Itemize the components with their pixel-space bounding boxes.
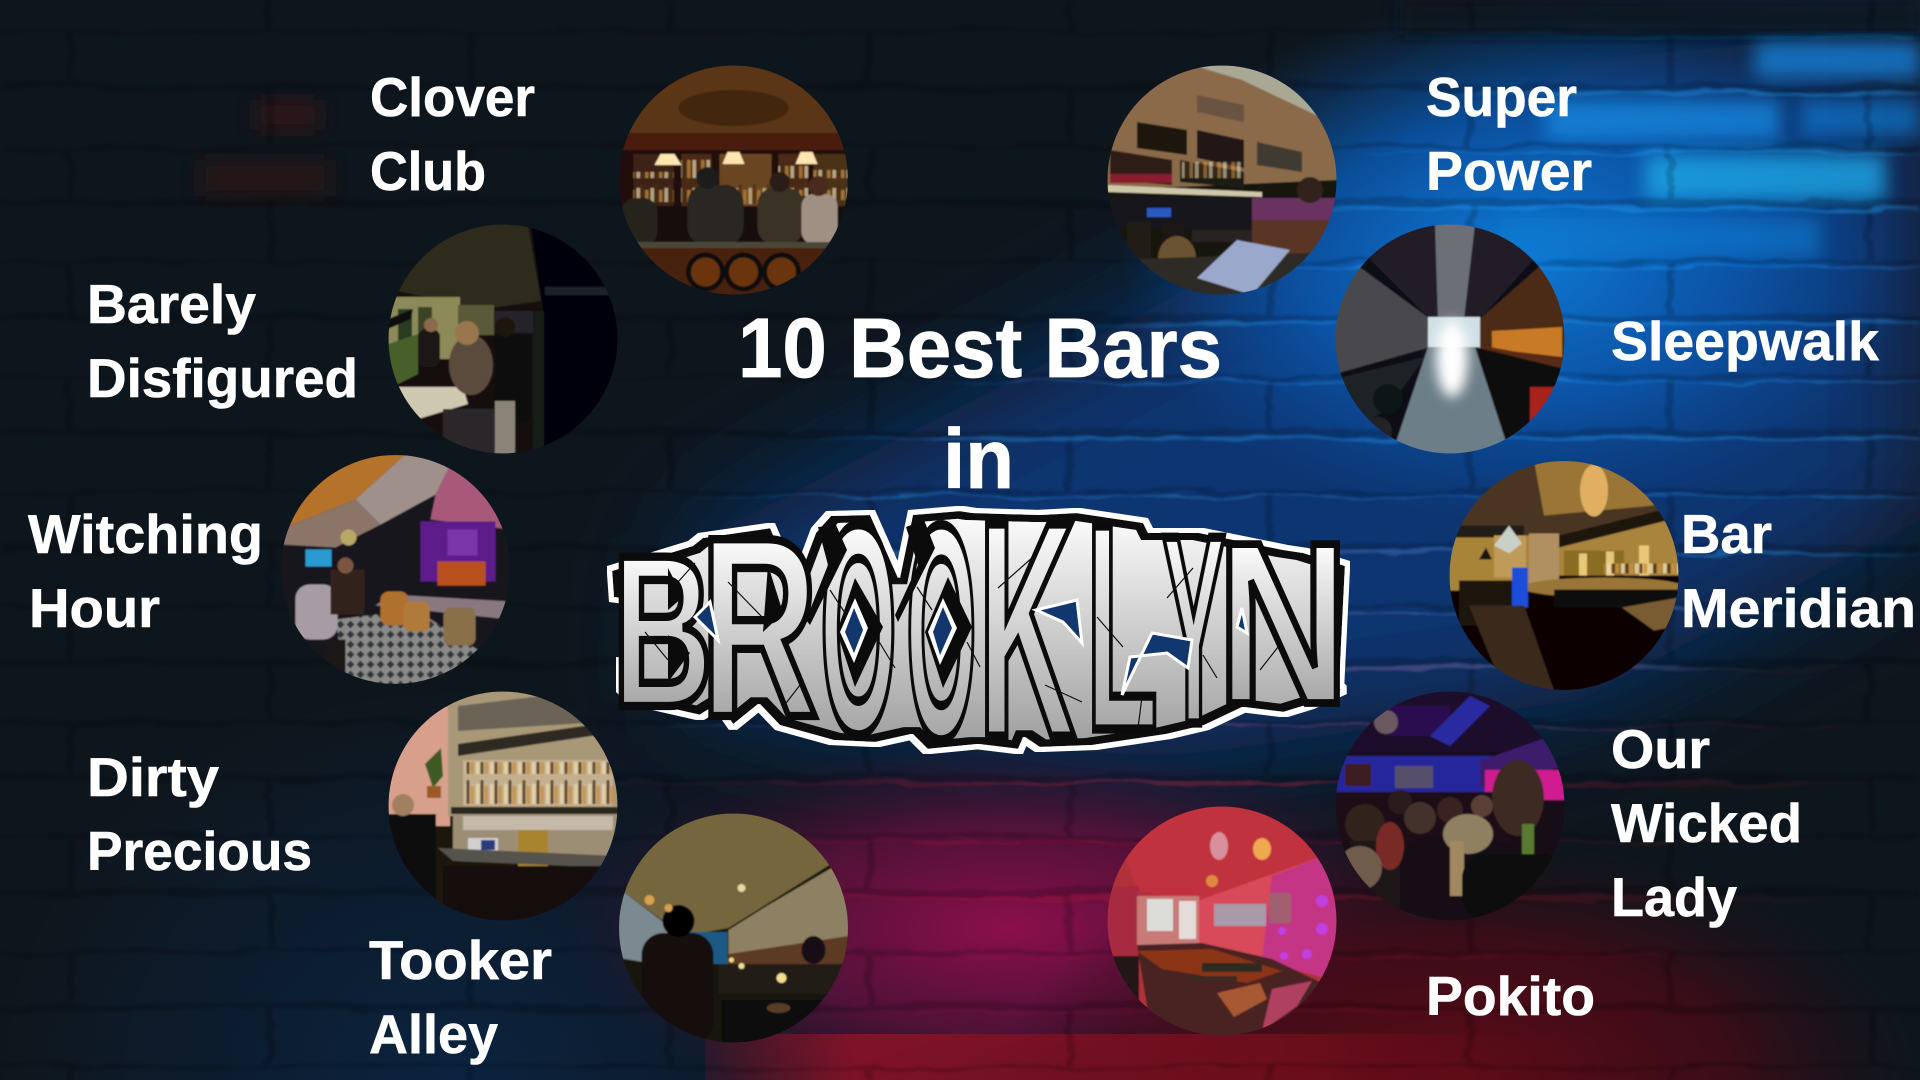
label: Pokito: Pokito: [1426, 965, 1595, 1027]
title: 10 Best Bars: [738, 301, 1222, 395]
logo backing plate: [611, 510, 1346, 750]
label: Clover Club: Club: [370, 140, 486, 202]
label: Bar Meridian: Meridian: [1681, 577, 1916, 639]
label: Super Power: [1426, 66, 1592, 202]
title: in: [943, 412, 1014, 506]
logo shading and diamonds: [668, 520, 972, 688]
title: [738, 301, 1222, 506]
photo: Pokito bar: [1107, 806, 1337, 1036]
photo: Dirty Precious bar: [388, 691, 618, 921]
label: Bar Meridian: [1681, 503, 1916, 639]
photo: Clover Club bar: [618, 65, 848, 295]
label: Bar Meridian: Bar: [1681, 503, 1772, 565]
logo letters: Y: [1162, 479, 1225, 780]
label: Our Wicked Lady: [1611, 718, 1802, 928]
logo letters: O: [906, 462, 977, 802]
photo: Tooker Alley bar: [618, 813, 848, 1043]
label: Super Power: Power: [1426, 140, 1592, 202]
label: Witching Hour: Witching: [28, 503, 263, 565]
label: Tooker Alley: Alley: [369, 1003, 498, 1065]
photo: Barely Disfigured bar: [388, 224, 618, 454]
logo letters: R: [700, 484, 818, 771]
label: Witching Hour: Hour: [29, 577, 160, 639]
label: Barely Disfigured: Barely: [87, 273, 256, 335]
label: Tooker Alley: Tooker: [369, 929, 552, 991]
label: Dirty Precious: Dirty: [87, 746, 219, 808]
photo: Our Wicked Lady crowd: [1335, 691, 1565, 921]
label: Barely Disfigured: [87, 273, 358, 409]
label: Our Wicked Lady: Our: [1611, 718, 1710, 780]
photo: Sleepwalk bar: [1335, 224, 1565, 454]
label: Our Wicked Lady: Lady: [1611, 866, 1737, 928]
logo letters: B: [612, 510, 713, 752]
logo letters: O: [820, 464, 897, 795]
label: Dirty Precious: Precious: [87, 820, 312, 882]
label: Witching Hour: [28, 503, 263, 639]
logo gaps showing the wall: [695, 600, 1247, 695]
label: Dirty Precious: [87, 746, 312, 882]
logo: BROOKLYN graffiti lettering: [611, 459, 1349, 802]
label: Our Wicked Lady: Wicked: [1611, 792, 1802, 854]
photo: Super Power bar: [1107, 65, 1337, 295]
photo: Witching Hour bar: [280, 454, 510, 684]
label: Tooker Alley: [369, 929, 552, 1065]
logo letters: [612, 459, 1349, 802]
logo letters: K: [978, 459, 1075, 802]
label: Sleepwalk: Sleepwalk: [1611, 310, 1879, 372]
logo letters: N: [1217, 495, 1349, 753]
logo letters: L: [1086, 462, 1158, 792]
label: Super Power: Super: [1426, 66, 1577, 128]
label: Clover Club: [370, 66, 535, 202]
label: Barely Disfigured: Disfigured: [87, 347, 358, 409]
label: Clover Club: Clover: [370, 66, 535, 128]
photo: Bar Meridian interior: [1449, 460, 1686, 690]
